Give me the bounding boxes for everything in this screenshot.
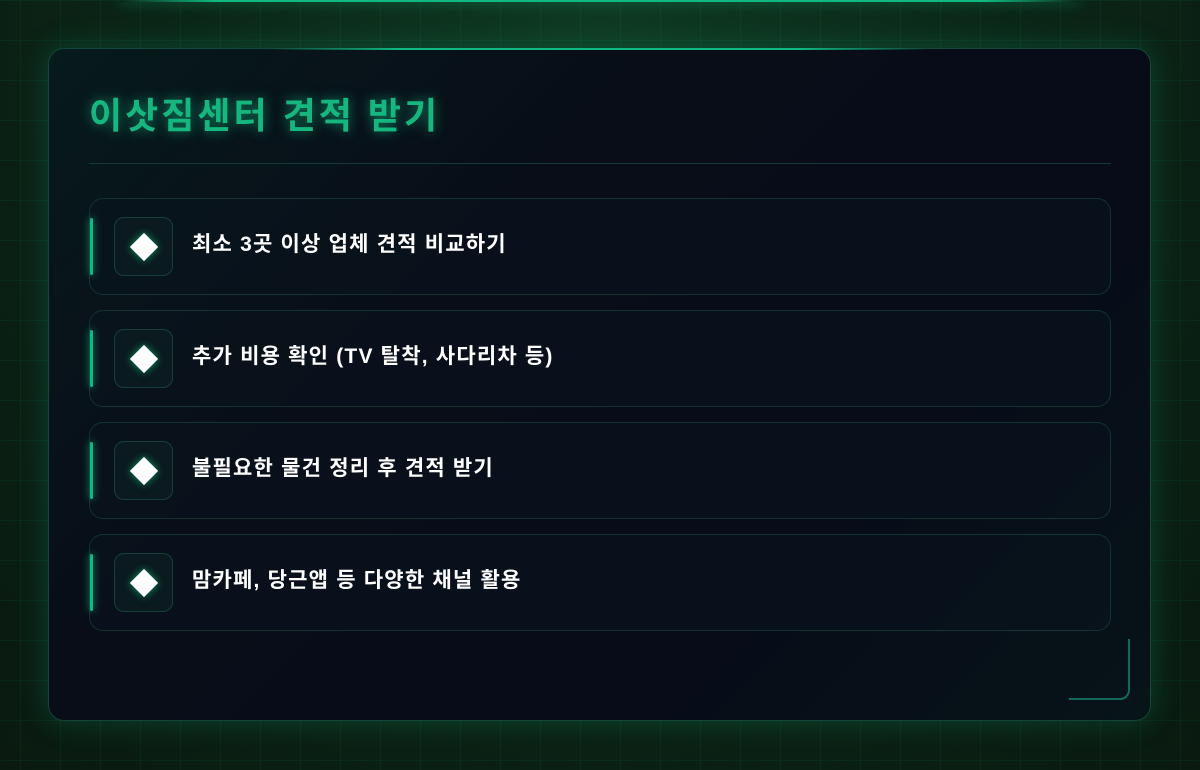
icon: diamond: [114, 441, 173, 500]
text: 추가 비용 확인 (TV 탈착, 사다리차 등): [192, 345, 554, 368]
text: 최소 3곳 이상 업체 견적 비교하기: [192, 233, 507, 256]
icon: diamond: [114, 553, 173, 612]
item 1: [89, 198, 1111, 295]
item 2: [89, 310, 1111, 407]
text: 맘카페, 당근앱 등 다양한 채널 활용: [192, 569, 522, 592]
corner accent: [1069, 639, 1130, 700]
title: 이삿짐센터 견적 받기: [89, 95, 440, 136]
text: 불필요한 물건 정리 후 견적 받기: [192, 457, 494, 480]
icon: diamond: [114, 217, 173, 276]
item 4: [89, 534, 1111, 631]
icon: diamond: [114, 329, 173, 388]
item 3: [89, 422, 1111, 519]
